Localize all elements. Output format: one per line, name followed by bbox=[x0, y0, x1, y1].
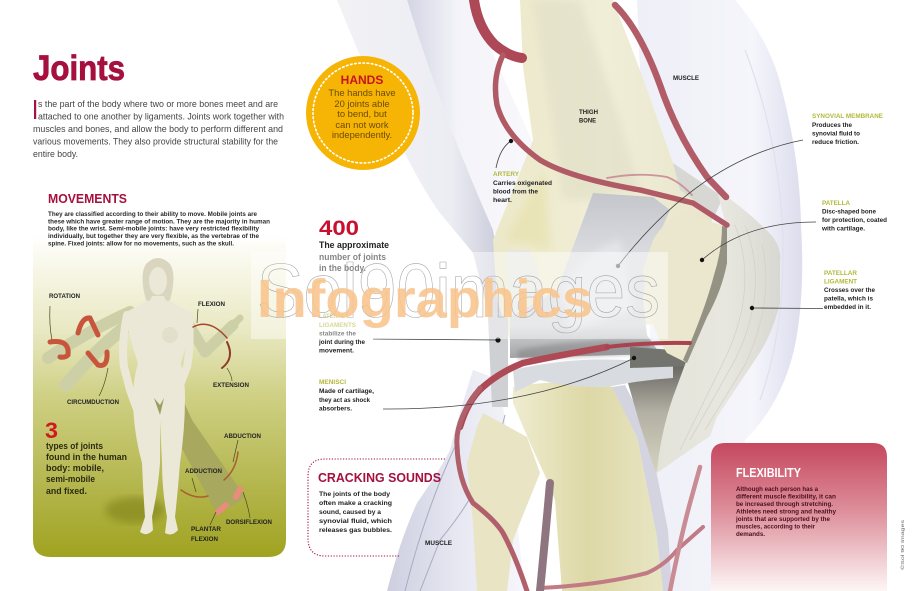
callout: hands: to bend, but bbox=[337, 108, 387, 119]
label: menisci bbox=[319, 379, 374, 412]
muscle: left upper bands bbox=[337, 0, 533, 320]
callout: cracking sounds: The joints of the body bbox=[319, 491, 390, 498]
label: patella: PATELLA bbox=[822, 200, 850, 207]
meniscus cartilage bbox=[513, 360, 673, 392]
label: synovial membrane: Produces the bbox=[812, 122, 852, 129]
synovial membrane capsule bbox=[510, 193, 670, 358]
movement labels: EXTENSION bbox=[213, 383, 249, 389]
label: lateral ligaments: LATERAL bbox=[319, 313, 345, 320]
title: Joints bbox=[33, 49, 125, 88]
callout: 3 types of joints: semi-mobile bbox=[46, 474, 95, 484]
label: menisci: Made of cartilage, bbox=[319, 388, 374, 395]
ghost limbs bbox=[48, 312, 245, 510]
movements text: these which have greater range of motion. They are the majority in human bbox=[48, 218, 270, 225]
panel: flexibility: joints that are supported by the bbox=[735, 516, 831, 523]
knee illustration bbox=[337, 0, 802, 591]
intro text: entire body. bbox=[33, 148, 78, 159]
intro text bbox=[33, 98, 284, 159]
panel: flexibility: be increased through stretching. bbox=[736, 501, 833, 508]
arteries bbox=[457, 0, 727, 591]
leader lines bbox=[50, 306, 250, 525]
label: artery: heart. bbox=[493, 197, 512, 204]
movements text: spine. Fixed joints: allow for no movements, such as the skull. bbox=[48, 240, 234, 247]
label: lateral ligaments: stabilize the bbox=[319, 330, 357, 338]
movement labels: CIRCUMDUCTION bbox=[67, 400, 119, 406]
callout: cracking sounds: synovial fluid, which bbox=[319, 518, 392, 525]
motion arrows bbox=[50, 318, 240, 512]
movement labels: FLEXION bbox=[191, 537, 218, 543]
label: thigh bone: THIGH bbox=[579, 110, 598, 116]
label: menisci: they act as shock bbox=[319, 397, 370, 404]
callout: cracking sounds: CRACKING SOUNDS bbox=[318, 470, 441, 485]
leader lines with dots bbox=[373, 139, 823, 409]
movement labels: PLANTAR bbox=[191, 527, 222, 533]
label: synovial membrane bbox=[812, 113, 883, 146]
rear joint shadow bbox=[622, 362, 692, 474]
intro text: attached to one another by ligaments. Joints work together with bbox=[38, 110, 284, 122]
callout: 3 types of joints: 3 bbox=[45, 418, 58, 443]
shin bone bbox=[513, 382, 663, 591]
movements text: individually, but together they are very flexible, as the vertebrae of the bbox=[48, 233, 259, 240]
watermark: Sol90images bbox=[257, 249, 660, 334]
label: lateral ligaments bbox=[318, 313, 365, 354]
patellar ligament bbox=[657, 190, 780, 473]
label: menisci: absorbers. bbox=[319, 406, 352, 412]
panel: flexibility: muscles, according to their bbox=[736, 524, 816, 530]
movement labels: DORSIFLEXION bbox=[226, 520, 272, 526]
callout: 400 joints: The approximate bbox=[319, 240, 389, 250]
label: synovial membrane: reduce friction. bbox=[812, 139, 859, 146]
panel: flexibility: Although each person has a bbox=[736, 486, 819, 493]
movement labels: ROTATION bbox=[49, 294, 80, 300]
callout: 3 types of joints: types of joints bbox=[46, 441, 103, 451]
callout: hands: HANDS bbox=[341, 73, 383, 87]
panel: movements figure bbox=[33, 235, 286, 557]
callout: cracking sounds: releases gas bubbles. bbox=[319, 527, 392, 534]
panel background bbox=[33, 235, 286, 557]
muscle: lower left band bbox=[387, 370, 525, 591]
label: synovial membrane: synovial fluid to bbox=[812, 130, 860, 138]
figure shadow bbox=[105, 497, 165, 523]
intro text: muscles and bones, and allow the body to perform different and bbox=[33, 123, 283, 134]
label: thigh bone: BONE bbox=[579, 118, 596, 124]
patella bbox=[643, 212, 727, 363]
callout: 3 types of joints bbox=[45, 418, 127, 496]
label: lateral ligaments: movement. bbox=[319, 348, 354, 354]
thigh bone bbox=[493, 0, 723, 340]
label: patellar ligament: LIGAMENT bbox=[824, 278, 857, 286]
label: patella: with cartilage. bbox=[821, 226, 865, 232]
label: patellar ligament bbox=[824, 270, 875, 311]
label: menisci: MENISCI bbox=[319, 379, 346, 386]
callout: 400 joints: in the body. bbox=[319, 263, 366, 273]
label: thigh bone bbox=[579, 110, 598, 124]
callout: hands: 20 joints able bbox=[334, 98, 390, 109]
movements text bbox=[48, 211, 270, 247]
movement labels: ADDUCTION bbox=[185, 469, 222, 475]
callout: hands: The hands have bbox=[328, 87, 396, 98]
label: artery: Carries oxigenated bbox=[493, 180, 552, 187]
label: lateral ligaments: joint during the bbox=[318, 339, 365, 346]
watermark: Infographics bbox=[257, 269, 593, 329]
panel: flexibility: FLEXIBILITY bbox=[736, 466, 802, 480]
label: artery bbox=[493, 171, 552, 204]
intro text: various movements. They also provide structural stability for the bbox=[33, 136, 278, 146]
panel: flexibility: different muscle flexibility, it can bbox=[736, 494, 836, 500]
callout: cracking sounds: often make a cracking bbox=[319, 500, 392, 507]
movements heading: MOVEMENTS bbox=[48, 191, 127, 206]
label: patella: for protection, coated bbox=[822, 217, 887, 224]
callout: hands: independently. bbox=[332, 129, 392, 140]
label: patellar ligament: PATELLAR bbox=[824, 270, 857, 277]
movements text: body, like the wrist. Semi-mobile joints: have very restricted flexibility bbox=[48, 226, 260, 233]
callout: 400 joints: number of joints bbox=[319, 252, 386, 262]
label: patellar ligament: embedded in it. bbox=[824, 304, 871, 311]
panel: flexibility: Athletes need strong and healthy bbox=[736, 508, 837, 516]
label: patella: Disc-shaped bone bbox=[822, 208, 876, 216]
movement labels bbox=[49, 294, 272, 543]
callout: 400 joints bbox=[319, 217, 389, 273]
lateral ligament bbox=[488, 317, 508, 407]
movements text: They are classified according to their ability to move. Mobile joints are bbox=[48, 211, 257, 218]
callout: hands bbox=[306, 56, 420, 170]
muscle: right outer bands bbox=[637, 0, 802, 591]
movement labels: FLEXION bbox=[198, 302, 225, 308]
image credit: ©Sol 90 Images bbox=[899, 519, 905, 570]
callout: hands: can not work bbox=[335, 119, 389, 130]
fibula bbox=[467, 413, 540, 591]
callout: cracking sounds bbox=[308, 459, 445, 556]
label: muscle top: MUSCLE bbox=[673, 76, 699, 82]
intro text: s the part of the body where two or more bones meet and are bbox=[38, 98, 278, 109]
callout: 3 types of joints: body: mobile, bbox=[46, 463, 104, 473]
label: patellar ligament: patella, which is bbox=[824, 296, 873, 302]
label: artery: ARTERY bbox=[493, 171, 520, 178]
callout: 3 types of joints: and fixed. bbox=[46, 486, 87, 496]
movement labels: ABDUCTION bbox=[224, 434, 261, 440]
callout: cracking sounds: sound, caused by a bbox=[319, 509, 381, 516]
panel: flexibility: demands. bbox=[736, 531, 765, 538]
callout: 400 joints: 400 bbox=[319, 217, 359, 240]
label: patella bbox=[821, 200, 887, 232]
label: patellar ligament: Crosses over the bbox=[824, 287, 875, 294]
label: artery: blood from the bbox=[493, 188, 539, 196]
translucent muscle over femur bbox=[507, 250, 557, 340]
label: lateral ligaments: LIGAMENTS bbox=[319, 322, 356, 329]
label: synovial membrane: SYNOVIAL MEMBRANE bbox=[812, 113, 883, 120]
label: muscle bottom: MUSCLE bbox=[425, 541, 452, 547]
callout: 3 types of joints: found in the human bbox=[46, 452, 127, 462]
panel: flexibility bbox=[711, 443, 887, 591]
woman figure bbox=[123, 258, 190, 534]
